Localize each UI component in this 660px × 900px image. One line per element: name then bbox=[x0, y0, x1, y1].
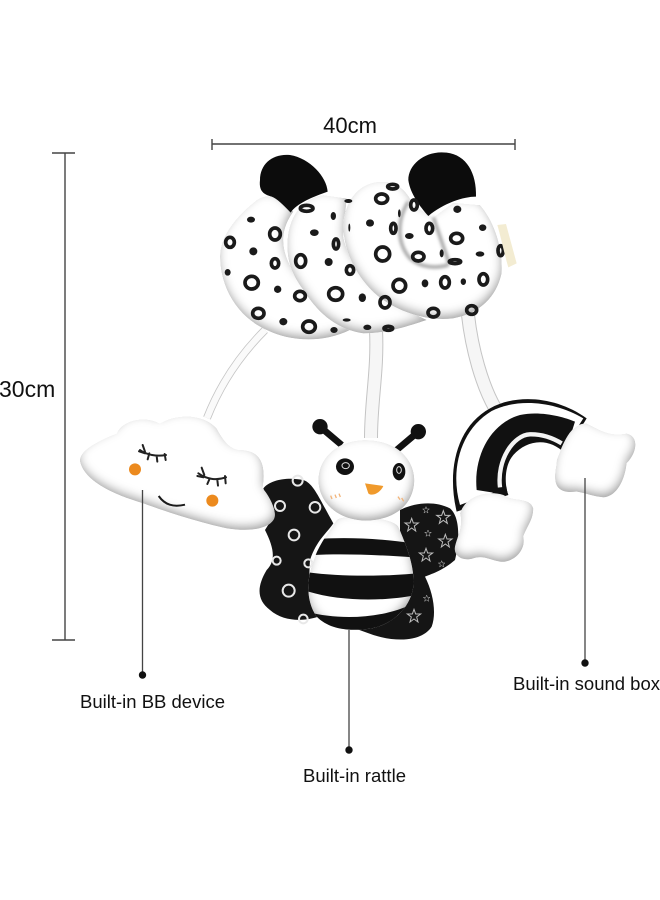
bee antennae bbox=[315, 422, 423, 450]
cloud eyes bbox=[139, 445, 226, 486]
cloud toy bbox=[80, 416, 275, 530]
rainbow outer edge bbox=[453, 399, 587, 512]
height dimension line bbox=[52, 153, 75, 640]
height label: 30cm bbox=[0, 376, 55, 402]
rainbow white band bbox=[456, 403, 583, 505]
bee toy bbox=[303, 422, 423, 637]
infographic bbox=[0, 118, 660, 782]
right star cloud bbox=[555, 423, 635, 497]
callout: BB device bbox=[80, 490, 225, 712]
rainbow thin stripe bbox=[500, 434, 562, 487]
callout: rattle: Built-in rattle bbox=[303, 765, 406, 786]
callout: BB device: Built-in BB device bbox=[80, 691, 225, 712]
width label: 40cm bbox=[323, 113, 377, 138]
middle coil bbox=[287, 195, 427, 333]
width dimension line bbox=[212, 139, 515, 150]
right coil bbox=[343, 182, 502, 319]
bee head bbox=[318, 440, 414, 521]
rainbow toy bbox=[453, 399, 635, 562]
left butterfly wing bbox=[260, 476, 333, 623]
left ear bbox=[260, 155, 328, 213]
dot pattern bbox=[225, 199, 486, 333]
right butterfly wing bbox=[350, 503, 458, 640]
inner coil shading bbox=[400, 202, 449, 267]
callout: sound box bbox=[513, 478, 660, 694]
cloud cheeks bbox=[129, 463, 218, 507]
callout: sound box: Built-in sound box bbox=[513, 673, 660, 694]
spiral plush body bbox=[220, 152, 517, 339]
left star cloud bbox=[455, 493, 533, 562]
bee beak bbox=[365, 483, 383, 495]
bee blush bbox=[331, 494, 404, 501]
bee eyes bbox=[336, 458, 405, 480]
rainbow black band bbox=[476, 414, 575, 495]
sewn-in tag bbox=[497, 224, 517, 267]
bee stripes bbox=[308, 538, 414, 630]
hanging straps bbox=[207, 315, 495, 438]
left coil bbox=[220, 196, 373, 339]
right ear bbox=[408, 152, 476, 216]
ring pattern bbox=[226, 184, 503, 332]
bee body bbox=[308, 517, 414, 630]
cloud mouth bbox=[159, 496, 185, 506]
callout: rattle bbox=[303, 630, 406, 786]
